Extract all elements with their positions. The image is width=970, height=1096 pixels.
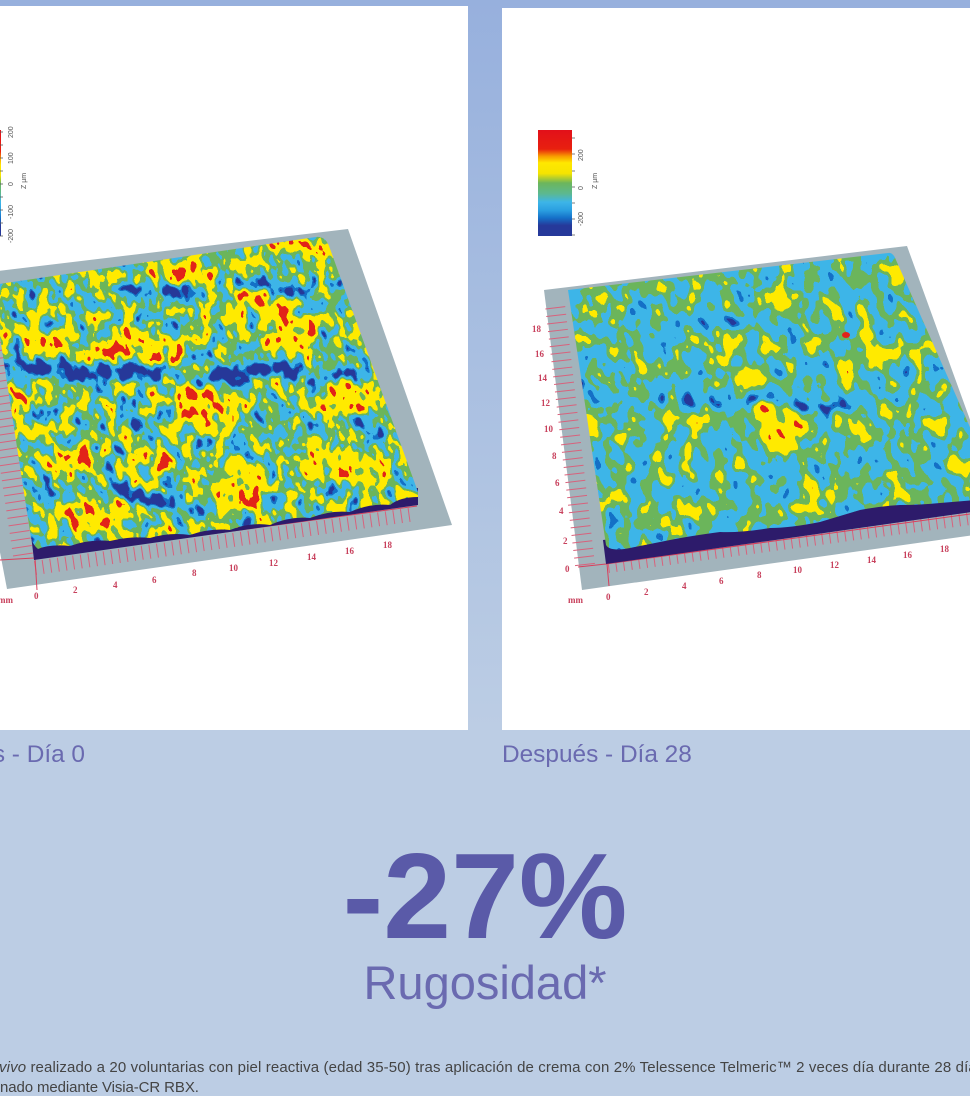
dark side wall of the surface	[31, 488, 418, 560]
axis numbers: 16	[903, 550, 912, 560]
colour scale legend: -100	[8, 205, 15, 219]
axis numbers: 4	[682, 581, 687, 591]
axis numbers: 10	[229, 563, 238, 573]
footnote line 2: nado mediante Visia-CR RBX.	[0, 1079, 199, 1096]
colour scale legend: 200	[8, 126, 15, 138]
axis numbers: 18	[383, 540, 392, 550]
axis numbers: 6	[555, 478, 560, 488]
colour relief map	[0, 236, 418, 549]
axis lines	[578, 514, 970, 586]
caption: after: Después - Día 28	[502, 741, 692, 768]
colour scale legend: Z µm	[21, 173, 28, 189]
colour scale legend: 0	[578, 186, 585, 190]
axis numbers: 8	[757, 570, 762, 580]
axis lines	[0, 506, 417, 590]
axis numbers: 14	[307, 552, 316, 562]
horizontal axis ticks	[608, 518, 970, 566]
axis numbers: 2	[73, 585, 78, 595]
axis numbers: 4	[113, 580, 118, 590]
axis numbers: 18	[940, 544, 950, 554]
axis numbers	[0, 540, 392, 605]
grey base plate	[0, 229, 452, 589]
colour scale legend	[0, 126, 28, 243]
axis numbers: 16	[535, 349, 544, 359]
colour scale legend: 200	[578, 149, 585, 161]
footnote line 1: vivo realizado a 20 voluntarias con piel reactiva (edad 35-50) tras aplicación de crema con 2% Telessence Telmeric™ 2 veces día durante 28 días.	[0, 1059, 970, 1076]
axis numbers: 10	[793, 565, 802, 575]
axis numbers: 2	[644, 587, 649, 597]
3D roughness surface, day 0	[0, 229, 452, 590]
axis numbers: 14	[867, 555, 876, 565]
axis numbers: 4	[559, 506, 564, 516]
colour scale legend: 0	[8, 182, 15, 186]
axis numbers: 6	[152, 575, 157, 585]
axis numbers: 2	[563, 536, 568, 546]
axis numbers: 14	[538, 373, 548, 383]
axis numbers: 18	[532, 324, 542, 334]
grey base plate	[544, 246, 970, 590]
dark side wall of the surface	[603, 490, 970, 564]
axis numbers: 0	[565, 564, 570, 574]
vertical axis ticks	[0, 305, 23, 555]
axis numbers	[532, 324, 950, 605]
axis numbers: 0	[606, 592, 611, 602]
axis numbers: 12	[269, 558, 278, 568]
3D roughness surface, day 28	[544, 246, 970, 590]
colour scale legend: Z µm	[592, 173, 599, 189]
colour scale legend: -200	[578, 212, 585, 226]
axis numbers: mm	[568, 595, 583, 605]
axis numbers: 8	[552, 451, 557, 461]
panel: before, day 0	[0, 6, 468, 730]
colour scale legend: -200	[8, 229, 15, 243]
colour relief map	[568, 252, 970, 550]
vertical axis ticks	[555, 305, 585, 565]
axis numbers: 0	[34, 591, 39, 601]
colour scale legend: 100	[8, 152, 15, 164]
red peak	[842, 332, 850, 338]
axis numbers: 6	[719, 576, 724, 586]
result label: Rugosidad*	[363, 956, 606, 1009]
panel: after, day 28	[502, 8, 970, 730]
axis numbers: 12	[541, 398, 550, 408]
axis numbers: 8	[192, 568, 197, 578]
horizontal axis ticks	[35, 514, 416, 568]
big result figure: -27%	[343, 828, 627, 964]
colour scale legend	[538, 130, 599, 236]
axis numbers: 12	[830, 560, 840, 570]
axis numbers: 10	[544, 424, 554, 434]
axis numbers: 16	[345, 546, 354, 556]
